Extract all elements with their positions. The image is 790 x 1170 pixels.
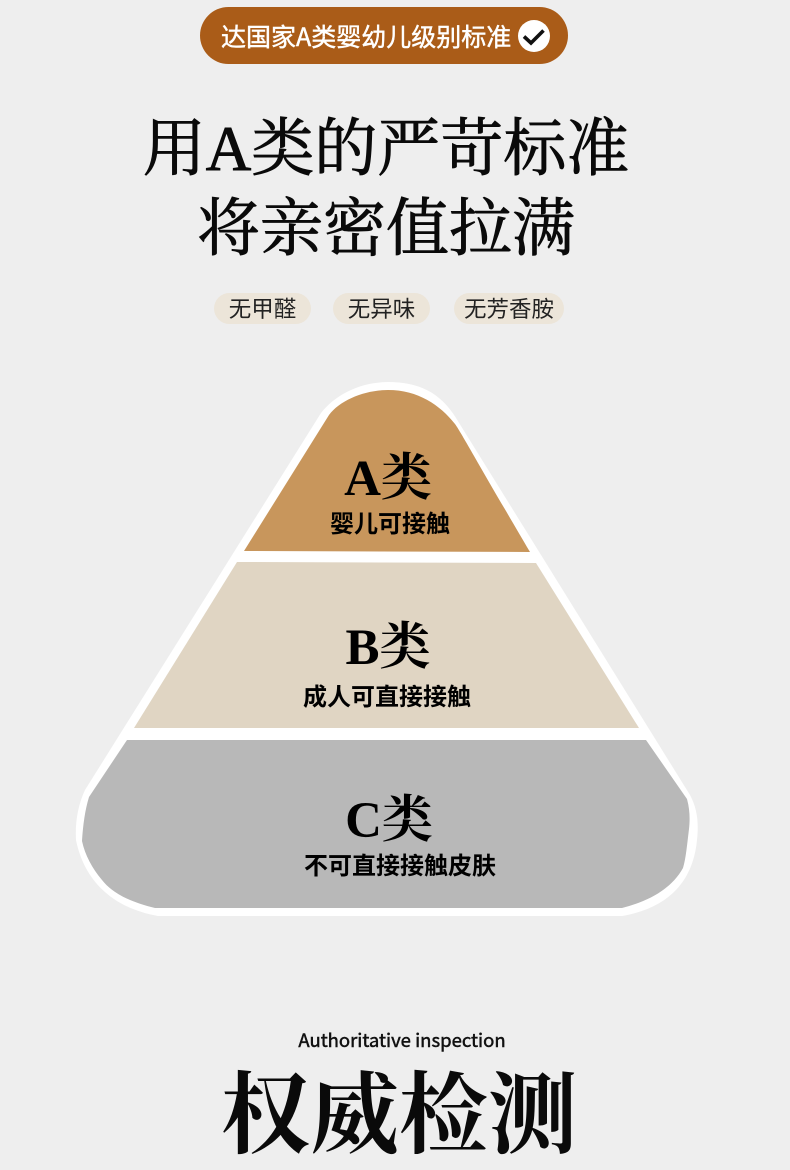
pyramid chart [76,382,698,916]
tag: no aromatic amines [454,293,564,324]
tag: no odor: 无异味 [348,297,415,322]
tier A heading: A类 [344,451,432,507]
tier B shape [134,562,639,728]
tier C shape [82,740,690,908]
icon: check mark [518,20,550,52]
tier B heading: B类 [345,620,431,676]
tag: no formaldehyde [214,293,311,324]
tier A shape [244,390,530,552]
title [143,114,629,264]
pyramid white outline [76,382,698,916]
tier B caption: 成人可直接接触 [303,684,471,711]
english subtitle: Authoritative inspection [298,1027,506,1053]
tier A caption: 婴儿可接触 [330,511,450,538]
badge: national class A standard [200,7,568,64]
title: 用A类的严苛标准 [143,114,629,184]
tag: no aromatic amines: 无芳香胺 [464,297,554,322]
tier C heading: C类 [345,793,433,849]
badge text: 达国家A类婴幼儿级别标准 [221,18,511,54]
tag: no odor [333,293,430,324]
tag: no formaldehyde: 无甲醛 [229,297,296,322]
section heading: 权威检测 [221,1068,577,1166]
title: 将亲密值拉满 [197,194,575,264]
tier C caption: 不可直接接触皮肤 [304,853,496,880]
